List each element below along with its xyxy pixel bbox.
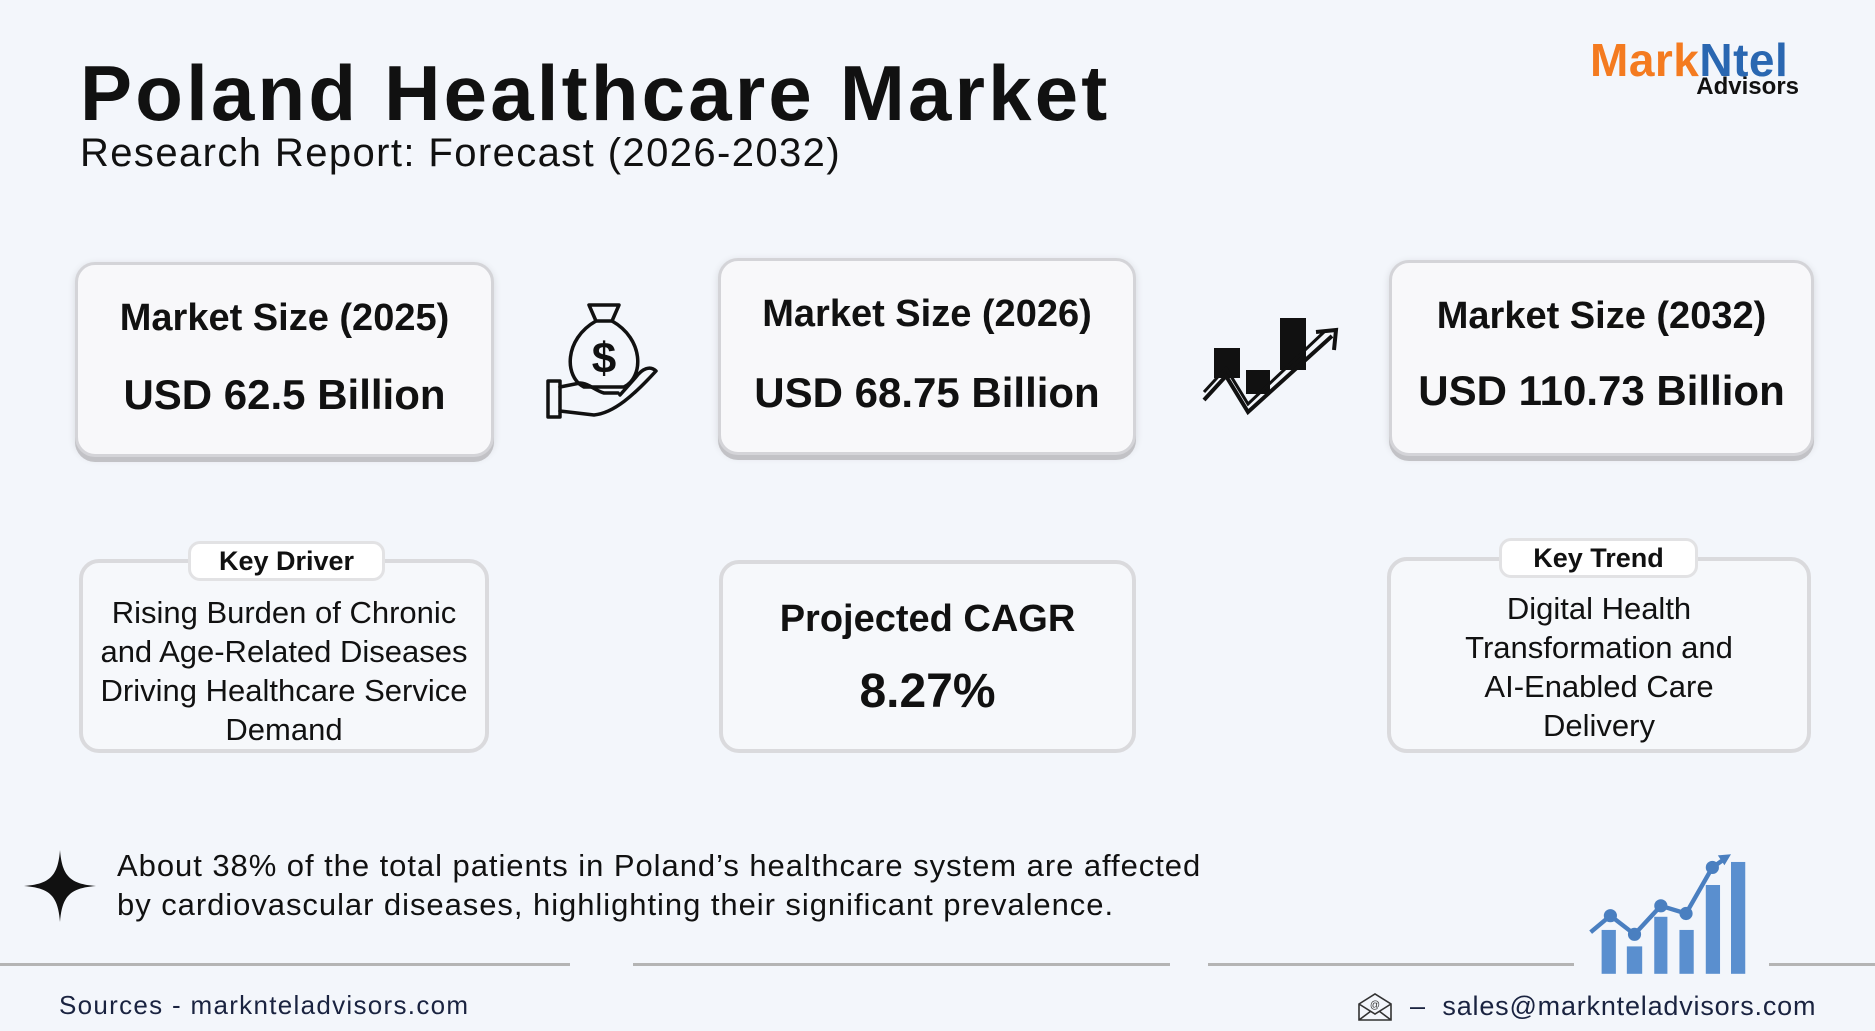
panel: key driver: Demand <box>225 712 343 747</box>
panel: key trend: Delivery <box>1543 708 1655 743</box>
fact text: About 38% of the total patients in Poland’s healthcare system are affected <box>117 848 1201 883</box>
panel: market size 2032: USD 110.73 Billion <box>1418 367 1785 414</box>
label: key driver <box>188 541 385 581</box>
icon: email: @ <box>1370 1000 1380 1011</box>
icon: money bag in hand: $ <box>592 334 616 383</box>
panel: market size 2032 <box>1389 260 1814 456</box>
panel: market size 2026: Market Size (2026) <box>762 293 1092 335</box>
panel: market size 2025 <box>75 262 494 457</box>
panel: projected CAGR: 8.27% <box>859 665 996 718</box>
panel: key driver <box>79 559 489 753</box>
panel: key trend: AI-Enabled Care <box>1484 669 1714 704</box>
panel: key trend: Digital Health <box>1507 591 1691 626</box>
logo: Advisors <box>1696 73 1799 100</box>
panel: market size 2026 <box>718 258 1136 455</box>
subtitle: Research Report: Forecast (2026-2032) <box>80 131 841 175</box>
panel: key driver: Driving Healthcare Service <box>100 673 467 708</box>
icon: money bag in hand <box>546 303 658 419</box>
sources: Sources - marknteladvisors.com <box>59 990 469 1020</box>
icon: email <box>1358 993 1392 1021</box>
panel: key driver: and Age-Related Diseases <box>100 634 468 669</box>
icon: sparkle <box>24 850 96 922</box>
fact text: by cardiovascular diseases, highlighting their significant prevalence. <box>117 887 1114 922</box>
label: key trend: Key Trend <box>1533 543 1664 573</box>
panel: market size 2025: USD 62.5 Billion <box>123 371 446 418</box>
panel: key trend: Transformation and <box>1465 630 1733 665</box>
label: key driver: Key Driver <box>219 546 354 576</box>
panel: projected CAGR: Projected CAGR <box>780 598 1075 640</box>
icon: blue bar chart <box>1589 854 1746 974</box>
panel: key driver: Rising Burden of Chronic <box>112 595 456 630</box>
title: Poland Healthcare Market <box>80 49 1110 137</box>
panel: market size 2032: Market Size (2032) <box>1437 295 1766 337</box>
panel: key trend <box>1387 557 1811 753</box>
panel: market size 2026: USD 68.75 Billion <box>754 369 1100 416</box>
label: key trend <box>1499 538 1698 578</box>
fact text <box>117 848 1201 922</box>
panel: projected CAGR <box>719 560 1136 753</box>
email text: – sales@marknteladvisors.com <box>1410 991 1816 1021</box>
logo: MarkNtel <box>1590 34 1788 86</box>
icon: growth chart arrow <box>1202 318 1338 416</box>
panel: market size 2025: Market Size (2025) <box>120 297 449 339</box>
